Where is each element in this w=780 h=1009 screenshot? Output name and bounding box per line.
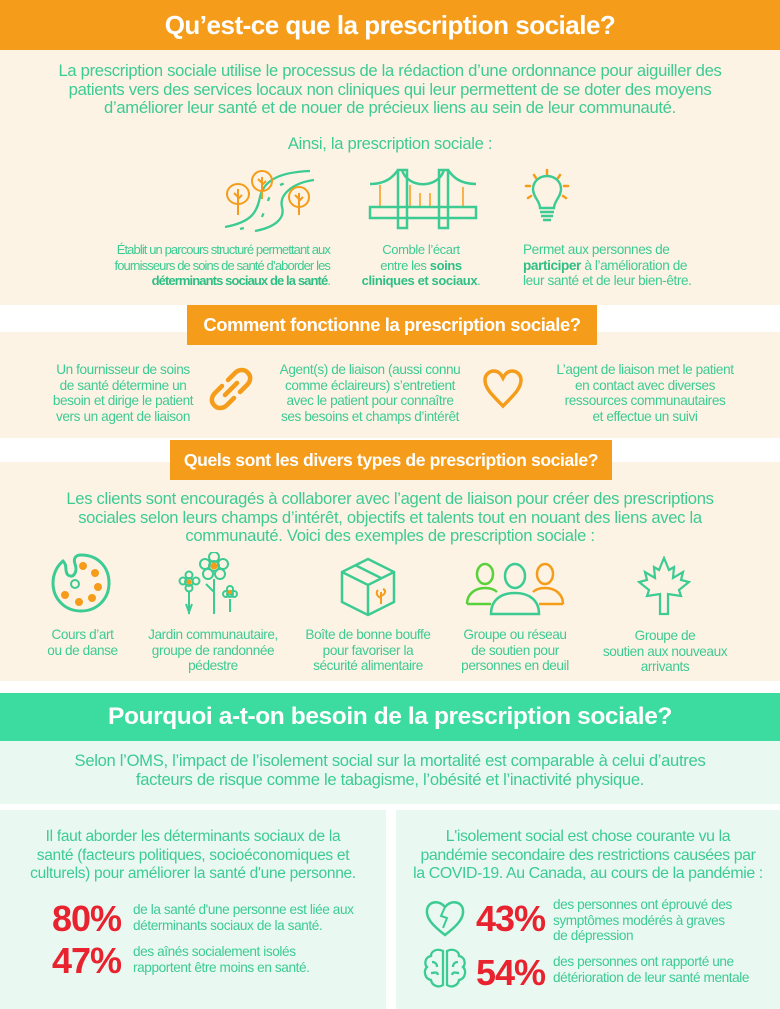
icon: heart	[483, 369, 523, 408]
text: caption participer: participer à l’amélioration de	[523, 258, 687, 272]
text: types intro: Les clients sont encouragés à collaborer avec l’agent de liaison pour créer des prescriptions	[66, 489, 714, 508]
text: types intro	[66, 489, 714, 545]
text: step 3	[556, 362, 734, 424]
icon: maple leaf	[637, 556, 691, 616]
icon: box	[340, 558, 396, 616]
text: caption participer	[523, 242, 692, 288]
stat: 47%	[52, 940, 310, 981]
text: step 2	[280, 362, 460, 424]
text: step 2: ses besoins et champs d’intérêt	[281, 408, 459, 424]
stat: 43%: symptômes modérés à graves	[553, 912, 725, 928]
text: arrivants caption	[603, 628, 728, 674]
text: caption écart: Comble l’écart	[382, 242, 460, 257]
heading: types: Quels sont les divers types de prescription sociale?	[184, 450, 598, 470]
text: ainsi: Ainsi, la prescription sociale :	[288, 134, 492, 153]
panel: left stats	[0, 810, 386, 1009]
text: OMS: facteurs de risque comme le tabagisme, l’obésité et l’inactivité physique.	[136, 770, 644, 788]
text: groupe deuil caption: personnes en deuil	[461, 658, 569, 673]
icon: people group	[466, 562, 564, 616]
text: definition	[58, 61, 722, 117]
text: caption écart: cliniques et sociaux.	[362, 273, 480, 288]
text: caption parcours: Établit un parcours structuré permettant aux	[117, 242, 330, 257]
stat: 80%: déterminants sociaux de la santé.	[133, 918, 322, 932]
text: step 1: de santé détermine un	[60, 378, 186, 392]
stat: 43%: de dépression	[553, 928, 633, 943]
stat: 43%: des personnes ont éprouvé des	[553, 897, 732, 912]
icon: chain link	[210, 368, 252, 410]
text: definition: La prescription sociale utilise le processus de la rédaction d’une ordonnance pour aiguiller des	[58, 61, 722, 80]
title banner	[0, 0, 780, 50]
panel: right stats	[396, 810, 780, 1009]
text: left panel intro	[30, 828, 356, 882]
icon: road with trees	[224, 170, 314, 232]
text: types intro: communauté. Voici des exemples de prescription sociale :	[185, 526, 595, 545]
text: definition: patients vers des services locaux non cliniques qui leur permettent de se doter des moyens	[69, 80, 711, 98]
text: step 3: ressources communautaires	[565, 393, 725, 408]
text: arrivants caption: arrivants	[641, 659, 689, 674]
text: arrivants caption: soutien aux nouveaux	[603, 644, 727, 658]
title banner: Qu’est-ce que la prescription sociale?	[165, 10, 615, 40]
heading: comment fonctionne: Comment fonctionne la prescription sociale?	[203, 314, 581, 335]
text: caption parcours: déterminants sociaux de la santé.	[152, 273, 330, 288]
text: caption parcours	[114, 242, 331, 288]
text: caption écart: entre les soins	[380, 258, 462, 272]
text: arrivants caption: Groupe de	[635, 628, 695, 643]
text: jardin caption: groupe de randonnée	[152, 642, 274, 658]
text: caption parcours: fournisseurs de soins de santé d’aborder les	[114, 258, 330, 272]
text: step 1: vers un agent de liaison	[56, 408, 190, 424]
text: jardin caption: pédestre	[188, 658, 238, 673]
stat: 54%: des personnes ont rapporté une	[553, 954, 734, 969]
stat: 47%: des aînés socialement isolés	[133, 944, 296, 959]
background: section 2 cream	[0, 332, 780, 438]
stat: 47%: rapportent être moins en santé.	[133, 960, 310, 974]
stat: 47%: 47%	[52, 940, 121, 981]
background: section 1 cream	[0, 50, 780, 305]
heading: pourquoi banner	[0, 693, 780, 741]
text: groupe deuil caption: Groupe ou réseau	[463, 627, 567, 642]
stat: 80%: de la santé d'une personne est liée aux	[133, 902, 354, 917]
background: section 4 mint	[0, 741, 780, 804]
text: step 2: avec le patient pour connaître	[286, 393, 454, 408]
text: step 3: L’agent de liaison met le patient	[556, 362, 734, 377]
text: left panel intro: culturels) pour améliorer la santé d'une personne.	[30, 865, 356, 882]
text: caption participer: Permet aux personnes de	[523, 242, 669, 257]
background: section 3 cream	[0, 462, 780, 681]
text: groupe deuil caption	[461, 627, 569, 673]
text: step 3: en contact avec diverses	[575, 378, 715, 392]
text: left panel intro: Il faut aborder les déterminants sociaux de la	[46, 828, 340, 845]
text: step 1: Un fournisseur de soins	[56, 362, 190, 377]
text: step 2: comme éclaireurs) s’entretient	[285, 378, 455, 392]
text: OMS	[75, 751, 706, 788]
stat: 54%: 54%	[476, 952, 545, 993]
text: art caption: Cours d’art	[51, 627, 114, 642]
text: step 3: et effectue un suivi	[592, 408, 698, 424]
heading: types	[170, 440, 612, 480]
text: art caption	[47, 627, 118, 658]
icon: flowers	[178, 552, 238, 615]
text: right panel intro: L'isolement social est chose courante vu la	[446, 828, 730, 845]
text: types intro: sociales selon leurs champs d’intérêt, objectifs et talents tout en nouant des liens avec la	[78, 508, 702, 526]
stat: 54%	[476, 952, 749, 993]
text: jardin caption: Jardin communautaire,	[148, 627, 278, 642]
text: art caption: ou de danse	[47, 642, 118, 658]
text: step 1: besoin et dirige le patient	[53, 393, 193, 408]
text: caption écart	[362, 242, 480, 288]
icon: broken heart	[426, 901, 464, 937]
text: boîte caption: sécurité alimentaire	[313, 658, 423, 673]
text: definition: d’améliorer leur santé et de nouer de précieux liens au sein de leur communauté.	[104, 98, 676, 117]
icon: palette	[52, 554, 110, 612]
text: right panel intro: pandémie secondaire des restrictions causées par	[420, 846, 756, 864]
stat: 80%	[52, 898, 354, 939]
stat: 80%: 80%	[52, 898, 121, 939]
text: jardin caption	[148, 627, 278, 673]
text: step 2: Agent(s) de liaison (aussi connu	[280, 362, 460, 377]
stat: 54%: détérioration de leur santé mentale	[553, 970, 749, 984]
text: boîte caption	[305, 627, 431, 673]
text: right panel intro	[413, 828, 763, 882]
text: OMS: Selon l’OMS, l’impact de l’isolement social sur la mortalité est comparable à celui d’autres	[75, 751, 705, 770]
stat: 43%: 43%	[476, 898, 545, 939]
heading: pourquoi banner: Pourquoi a-t-on besoin de la prescription sociale?	[108, 703, 672, 730]
text: right panel intro: la COVID-19. Au Canada, au cours de la pandémie :	[413, 865, 763, 882]
icon: light bulb	[524, 168, 570, 222]
text: step 1	[53, 362, 194, 424]
icon: bridge	[368, 168, 478, 230]
text: left panel intro: santé (facteurs politiques, socioéconomiques et	[37, 846, 349, 864]
text: boîte caption: Boîte de bonne bouffe	[305, 627, 431, 642]
heading: comment fonctionne	[187, 305, 597, 345]
text: boîte caption: pour favoriser la	[323, 642, 413, 658]
icon: brain	[424, 948, 466, 988]
text: caption participer: leur santé et de leur bien-être.	[523, 273, 692, 288]
text: groupe deuil caption: de soutien pour	[471, 642, 559, 658]
stat: 43%	[476, 897, 732, 943]
